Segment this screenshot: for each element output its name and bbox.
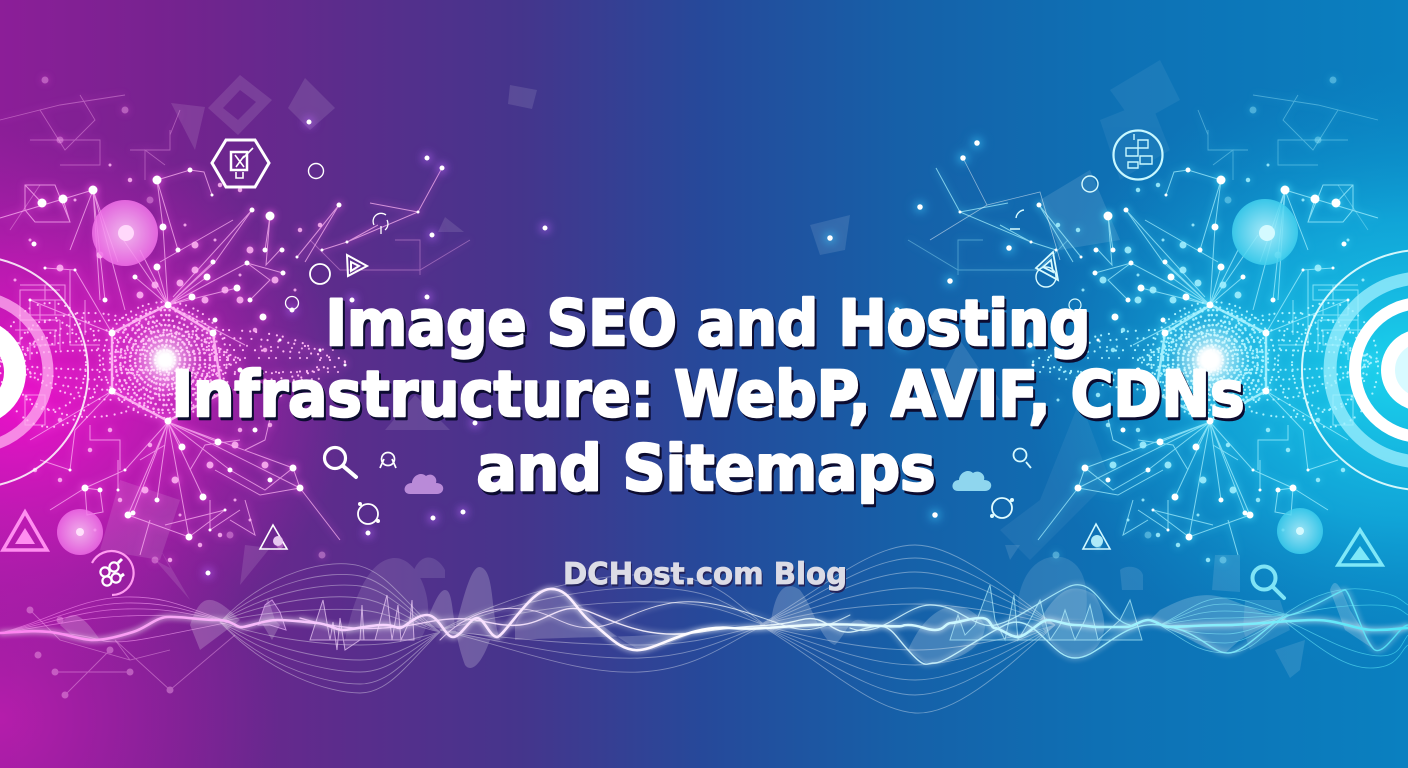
icon: right magnifier: [1252, 566, 1284, 598]
icon: right orbit ring: [992, 498, 1012, 518]
icon: left cloud: [405, 474, 443, 494]
scattered blue stars: [830, 143, 1030, 515]
wave: fan of thin lines: [220, 545, 1055, 713]
fainter background shapes, right: [1000, 60, 1180, 560]
right central burst: [1180, 330, 1240, 390]
wave: main glowing lines: [0, 585, 1408, 664]
scattered glowing stars: [208, 122, 545, 573]
icon: right cloud: [952, 471, 991, 491]
left large glowing orbs: [57, 200, 158, 555]
wave: translucent lobes: [60, 567, 1375, 668]
icon: left orbit ring: [358, 504, 378, 524]
icon: right small rings and triangles: [1010, 176, 1098, 311]
icon: left small rings and triangles: [286, 164, 388, 310]
icon: molecule circle: [92, 551, 134, 595]
title: Image SEO and Hosting: [326, 287, 1090, 360]
title: Infrastructure: WebP, AVIF, CDNs: [172, 358, 1244, 431]
subtitle: DCHost.com Blog: DCHost.com Blog: [563, 557, 847, 592]
title: and Sitemaps: [476, 432, 936, 505]
icon: right person search: [1014, 448, 1031, 468]
constellation links: [930, 158, 1060, 260]
right particle network: [908, 80, 1378, 560]
wave: spikes: [258, 585, 1142, 650]
faint background shapes: [100, 75, 1305, 678]
wave: ribbons of fine lines: [0, 589, 1408, 668]
icon: hexagon image: [212, 140, 269, 187]
icon: left small triangle: [260, 525, 287, 549]
left concentric rings: [0, 256, 88, 488]
icon: left magnifier: [324, 448, 356, 477]
left particle network: [0, 80, 470, 560]
icon: person search: [380, 452, 396, 468]
right large glowing orbs: [1232, 199, 1323, 554]
icon: left warning triangle: [3, 512, 47, 550]
icon: right small triangle: [1083, 524, 1110, 549]
title: [172, 287, 1244, 505]
faint network under the wave, left: [30, 610, 235, 695]
icon: right warning triangle: [1338, 530, 1382, 565]
left central burst: [139, 334, 191, 386]
icon: right flowchart circle: [1114, 130, 1162, 180]
right concentric rings: [1302, 250, 1408, 490]
